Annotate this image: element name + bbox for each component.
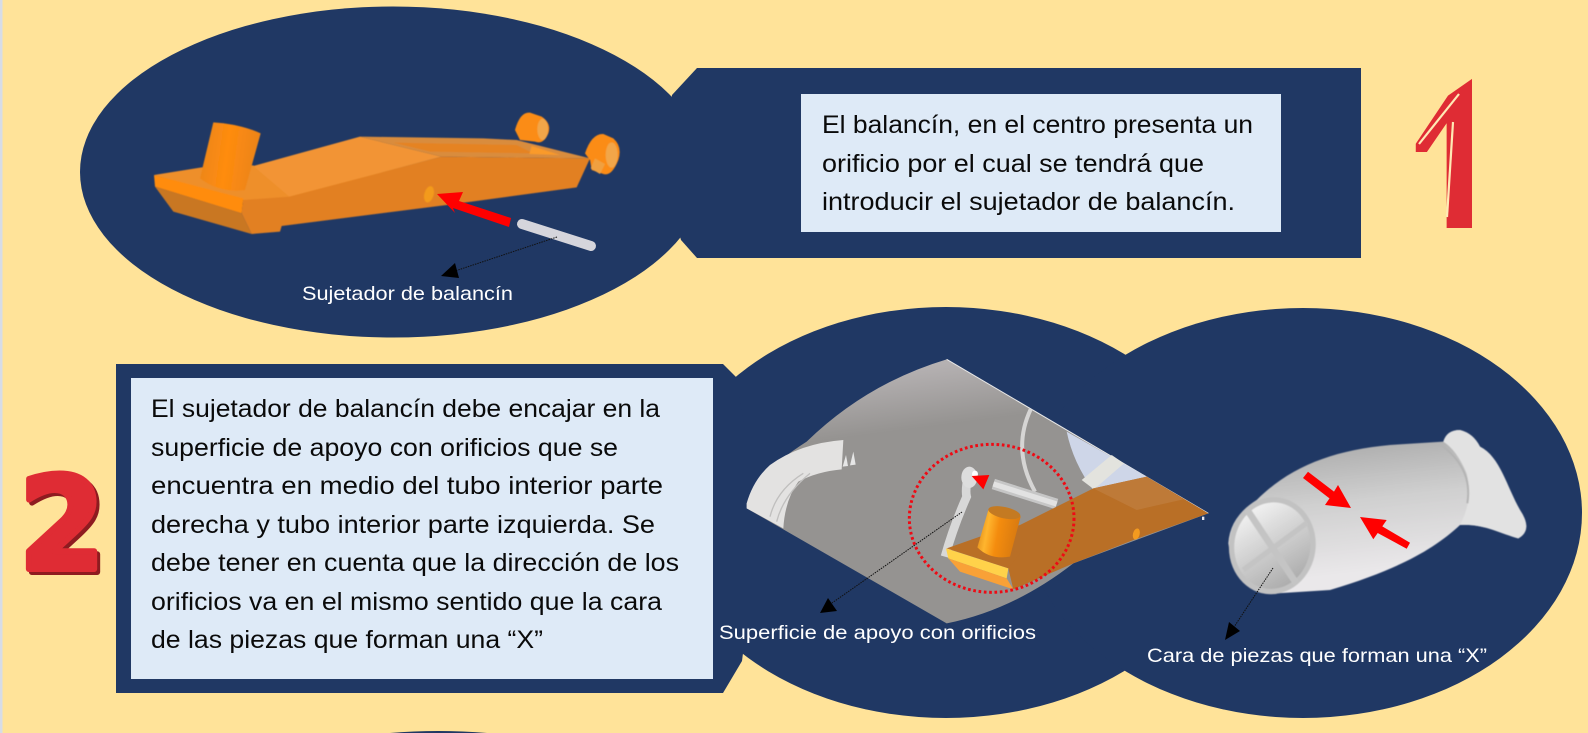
step 1 text box: introducir el sujetador de balancín. [822, 188, 1235, 216]
panel: step 1 [80, 6, 1361, 338]
number 1: 1 [1403, 5, 1507, 333]
red arrow: inward bottom [1360, 517, 1410, 549]
red arrow to hole [437, 192, 511, 227]
number 1 [1416, 79, 1472, 228]
pin: sujetador [522, 224, 591, 246]
number 2: 2 [22, 454, 108, 603]
step 2 text box: encuentra en medio del tubo interior parte [151, 472, 663, 500]
step 1 banner [660, 68, 1361, 258]
step 2 text box [131, 378, 713, 679]
label: superficie de apoyo con orificios: Superficie de apoyo con orificios [719, 622, 1036, 644]
red arrow: inward top [1303, 472, 1351, 508]
leader arrow: cara X [1225, 568, 1273, 640]
step 1 ellipse [80, 6, 706, 338]
number 2: 2 [19, 451, 105, 600]
step 2 text box: de las piezas que forman una “X” [151, 626, 543, 654]
step 1 text box [801, 94, 1281, 232]
label: sujetador de balancin: Sujetador de balancín [302, 283, 513, 305]
leader arrow: superficie [820, 512, 962, 613]
label: cara de piezas: Cara de piezas que forman una “X” [1147, 645, 1487, 667]
balancin 3D part [154, 113, 620, 234]
step 2 ellipse right [1024, 308, 1582, 718]
step 2 text box: debe tener en cuenta que la dirección de los [151, 549, 679, 577]
step 2 ellipse left [666, 307, 1226, 718]
step 1 text box: El balancín, en el centro presenta un [822, 111, 1253, 139]
leader arrow: sujetador [441, 237, 557, 278]
step 2 text box: superficie de apoyo con orificios que se [151, 434, 618, 462]
step 2 text box: El sujetador de balancín debe encajar en la [151, 395, 660, 423]
tube part with X pieces [1226, 430, 1526, 597]
assembly view: support surface and balancin [747, 359, 1208, 623]
step 2 text box: orificios va en el mismo sentido que la cara [151, 588, 662, 616]
step 2 text box: derecha y tubo interior parte izquierda. Se [151, 511, 655, 539]
next step shape, cropped [390, 731, 487, 733]
step 2 banner [116, 364, 760, 693]
left page edge [0, 0, 2, 733]
step 1 text box: orificio por el cual se tendrá que [822, 150, 1204, 178]
panel: step 2 [116, 307, 1582, 718]
